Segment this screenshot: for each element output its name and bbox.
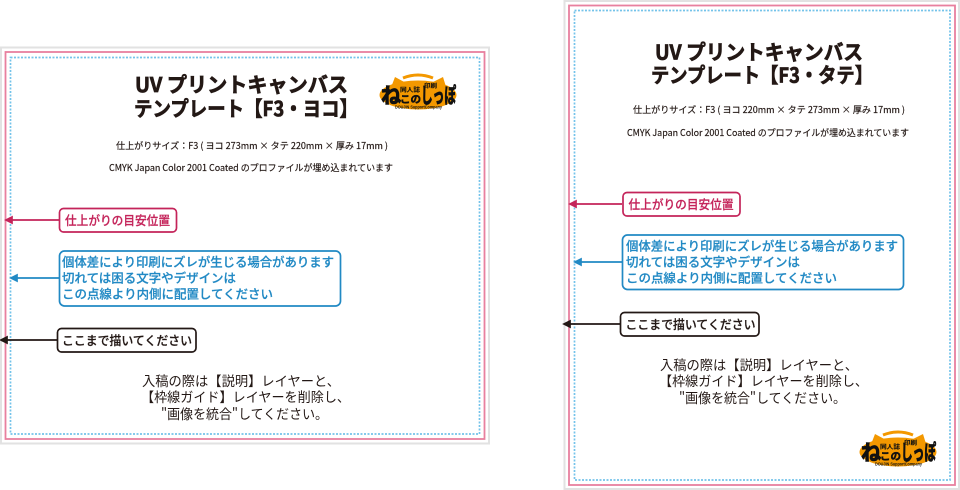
- size specification: 仕上がりサイズ：F3 ( ヨコ 220mm × タテ 273mm × 厚み 17mm ): [633, 102, 905, 116]
- submission instructions: "画像を統合"してください。: [161, 403, 328, 423]
- title: UV プリントキャンバス: [135, 68, 348, 98]
- pink trim line: [569, 6, 955, 485]
- submission instructions: 【枠線ガイド】レイヤーを削除し、: [659, 370, 868, 390]
- logo: nekonoshippo: 同人誌: [880, 442, 900, 451]
- submission instructions: "画像を統合"してください。: [679, 387, 846, 407]
- outer sheet border: [1, 48, 489, 444]
- title: [651, 36, 873, 88]
- pink trim line: [6, 52, 484, 439]
- callout: finish position: 仕上がりの目安位置: [628, 195, 734, 213]
- submission instructions: 入稿の際は【説明】レイヤーと、: [142, 370, 340, 390]
- arrow: to outer edge: [1, 337, 57, 343]
- colour profile note: CMYK Japan Color 2001 Coated のプロファイルが埋め込まれています: [109, 160, 393, 174]
- submission instructions: [141, 370, 350, 423]
- logo: nekonoshippo: DOUJIN SupportCompany: [395, 104, 442, 110]
- title: UV プリントキャンバス: [655, 36, 863, 66]
- callout: draw up to here: [564, 312, 759, 336]
- blue dotted safe line: [10, 58, 480, 434]
- logo: nekonoshippo: DOUJIN SupportCompany: [875, 462, 922, 468]
- size specification: 仕上がりサイズ：F3 ( ヨコ 273mm × タテ 220mm × 厚み 17mm ): [116, 138, 388, 152]
- logo: nekonoshippo: [380, 75, 456, 110]
- outer sheet border: [564, 1, 959, 489]
- callout: print misalignment: 個体差により印刷にズレが生じる場合があります: [62, 252, 334, 270]
- title: テンプレート【F3・タテ】: [651, 58, 873, 88]
- logo: nekonoshippo: この: [400, 91, 421, 106]
- title: [134, 68, 358, 122]
- logo: nekonoshippo: この: [880, 448, 901, 463]
- callout: print misalignment: [11, 251, 340, 306]
- colour profile note: CMYK Japan Color 2001 Coated のプロファイルが埋め込まれています: [627, 125, 909, 139]
- callout: print misalignment: [575, 235, 904, 290]
- logo: nekonoshippo: しっぽ: [421, 80, 456, 110]
- arrow: to blue dotted line: [11, 275, 59, 281]
- callout: print misalignment: この点線より内側に配置してください: [62, 284, 273, 302]
- arrow: to outer edge: [564, 321, 620, 327]
- blue dotted safe line: [574, 10, 950, 480]
- callout: print misalignment: 切れては困る文字やデザインは: [62, 268, 236, 286]
- logo: nekonoshippo: 印刷: [424, 81, 437, 90]
- callout: draw up to here: [1, 328, 196, 352]
- callout: finish position: [6, 208, 176, 232]
- callout: print misalignment: この点線より内側に配置してください: [626, 268, 837, 286]
- arrow: to pink trim line: [6, 217, 59, 223]
- logo: nekonoshippo: ね: [381, 80, 401, 110]
- logo: nekonoshippo: 印刷: [904, 438, 917, 447]
- logo: nekonoshippo: ね: [861, 437, 881, 467]
- panel: landscape template F3 yoko: [1, 48, 489, 444]
- arrow: to pink trim line: [570, 201, 622, 207]
- arrow: to blue dotted line: [575, 259, 622, 265]
- callout: print misalignment: 個体差により印刷にズレが生じる場合があります: [626, 236, 898, 254]
- logo: nekonoshippo: 同人誌: [400, 85, 420, 94]
- callout: finish position: [570, 192, 740, 216]
- panel: portrait template F3 tate: [564, 1, 959, 489]
- submission instructions: [659, 354, 868, 407]
- submission instructions: 【枠線ガイド】レイヤーを削除し、: [141, 386, 350, 406]
- callout: draw up to here: ここまで描いてください: [626, 315, 756, 333]
- callout: draw up to here: ここまで描いてください: [62, 331, 192, 349]
- logo: nekonoshippo: [860, 432, 936, 468]
- callout: finish position: 仕上がりの目安位置: [65, 211, 170, 229]
- submission instructions: 入稿の際は【説明】レイヤーと、: [660, 354, 858, 374]
- callout: print misalignment: 切れては困る文字やデザインは: [626, 252, 800, 270]
- title: テンプレート【F3・ヨコ】: [134, 92, 358, 122]
